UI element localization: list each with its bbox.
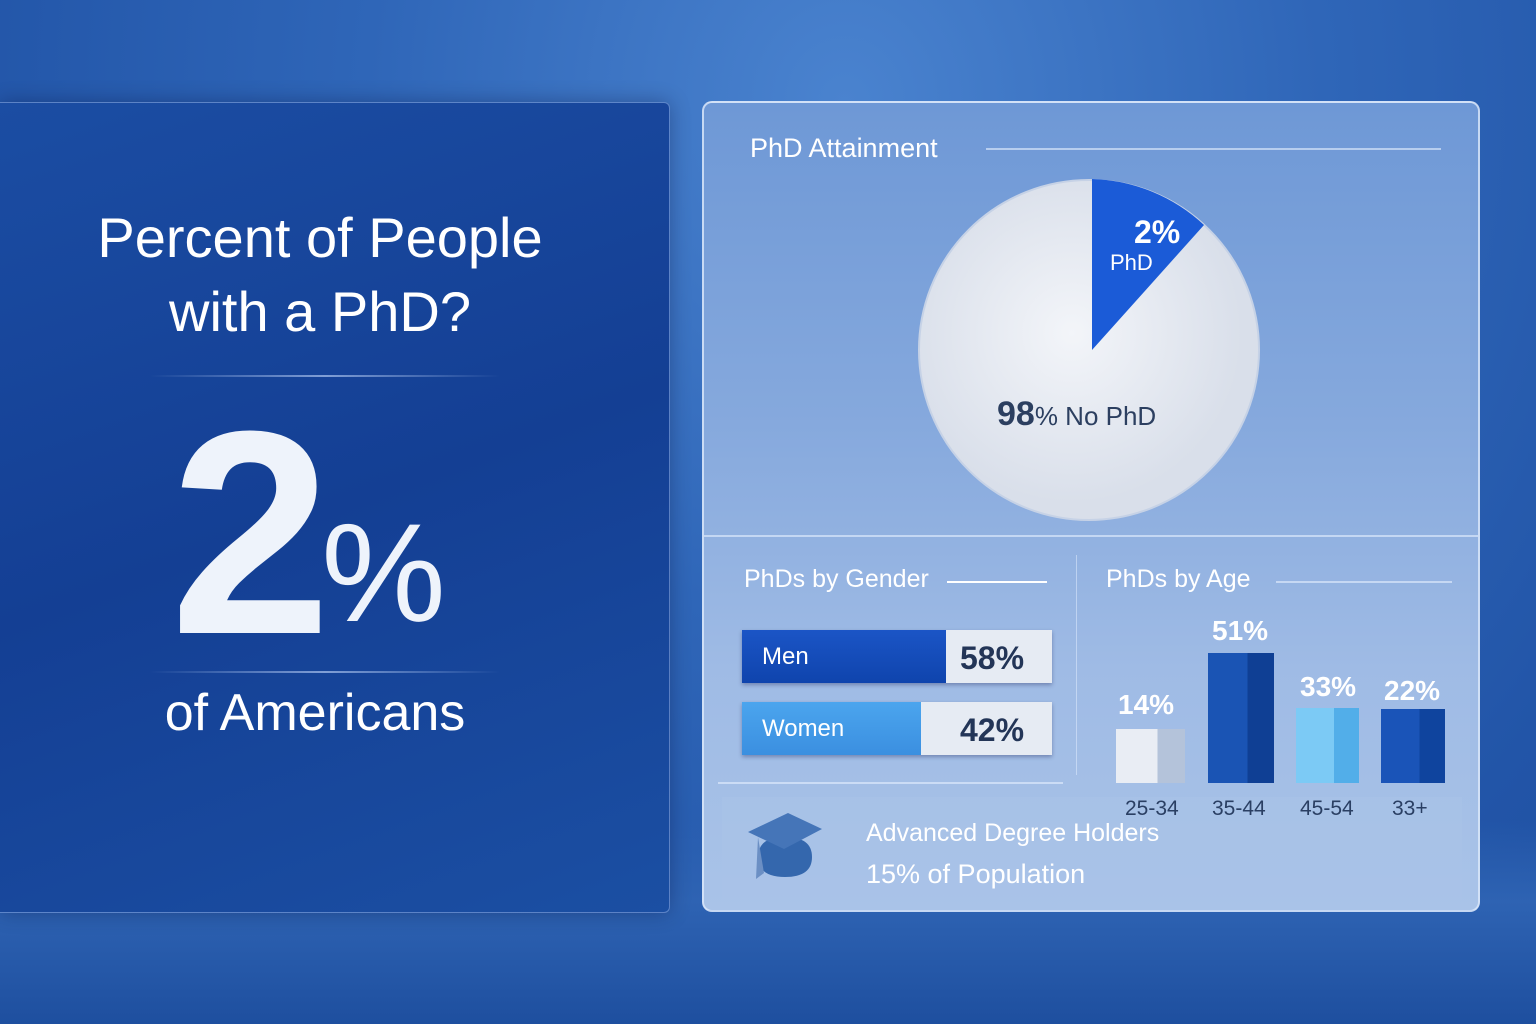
panel: charts — [702, 101, 1480, 912]
heading — [97, 206, 543, 343]
heading: Percent of People — [97, 206, 543, 269]
bar chart: age: 22% — [1384, 675, 1440, 706]
floor glow — [0, 820, 1536, 1024]
pie chart — [918, 179, 1260, 521]
callout: advanced degree holders: 33+ — [1392, 797, 1428, 820]
callout: advanced degree holders: 25-34 — [1125, 797, 1179, 820]
heading: age: PhDs by Age — [1106, 565, 1251, 593]
bar chart: age: 14% — [1118, 689, 1174, 720]
heading: with a PhD? — [169, 280, 471, 343]
big number: 2% — [170, 371, 436, 695]
callout: advanced degree holders: 15% of Population — [866, 859, 1085, 889]
pie chart: 98% No PhD — [997, 395, 1156, 433]
icon: graduation cap — [748, 813, 822, 879]
callout: advanced degree holders: 45-54 — [1300, 797, 1354, 820]
heading: gender: PhDs by Gender — [744, 565, 929, 593]
bar: women: Women — [762, 715, 844, 742]
bar chart: age — [1116, 615, 1445, 783]
bar: women: 42% — [960, 712, 1024, 748]
bar: women — [742, 702, 1052, 755]
heading: PhD attainment: PhD Attainment — [750, 133, 938, 163]
pie chart: PhD — [1110, 250, 1153, 275]
bar chart: age: 51% — [1212, 615, 1268, 646]
callout: advanced degree holders: Advanced Degree Holders — [866, 819, 1159, 847]
callout: advanced degree holders: 35-44 — [1212, 797, 1266, 820]
bar: men: 58% — [960, 640, 1024, 676]
bar: men: Men — [762, 643, 809, 670]
bar: men — [742, 630, 1052, 683]
bar chart: age: 33% — [1300, 671, 1356, 702]
panel: left title — [0, 102, 670, 913]
callout: advanced degree holders — [722, 797, 1462, 900]
subtitle: of Americans — [165, 684, 465, 742]
pie chart: 2% — [1134, 214, 1180, 250]
